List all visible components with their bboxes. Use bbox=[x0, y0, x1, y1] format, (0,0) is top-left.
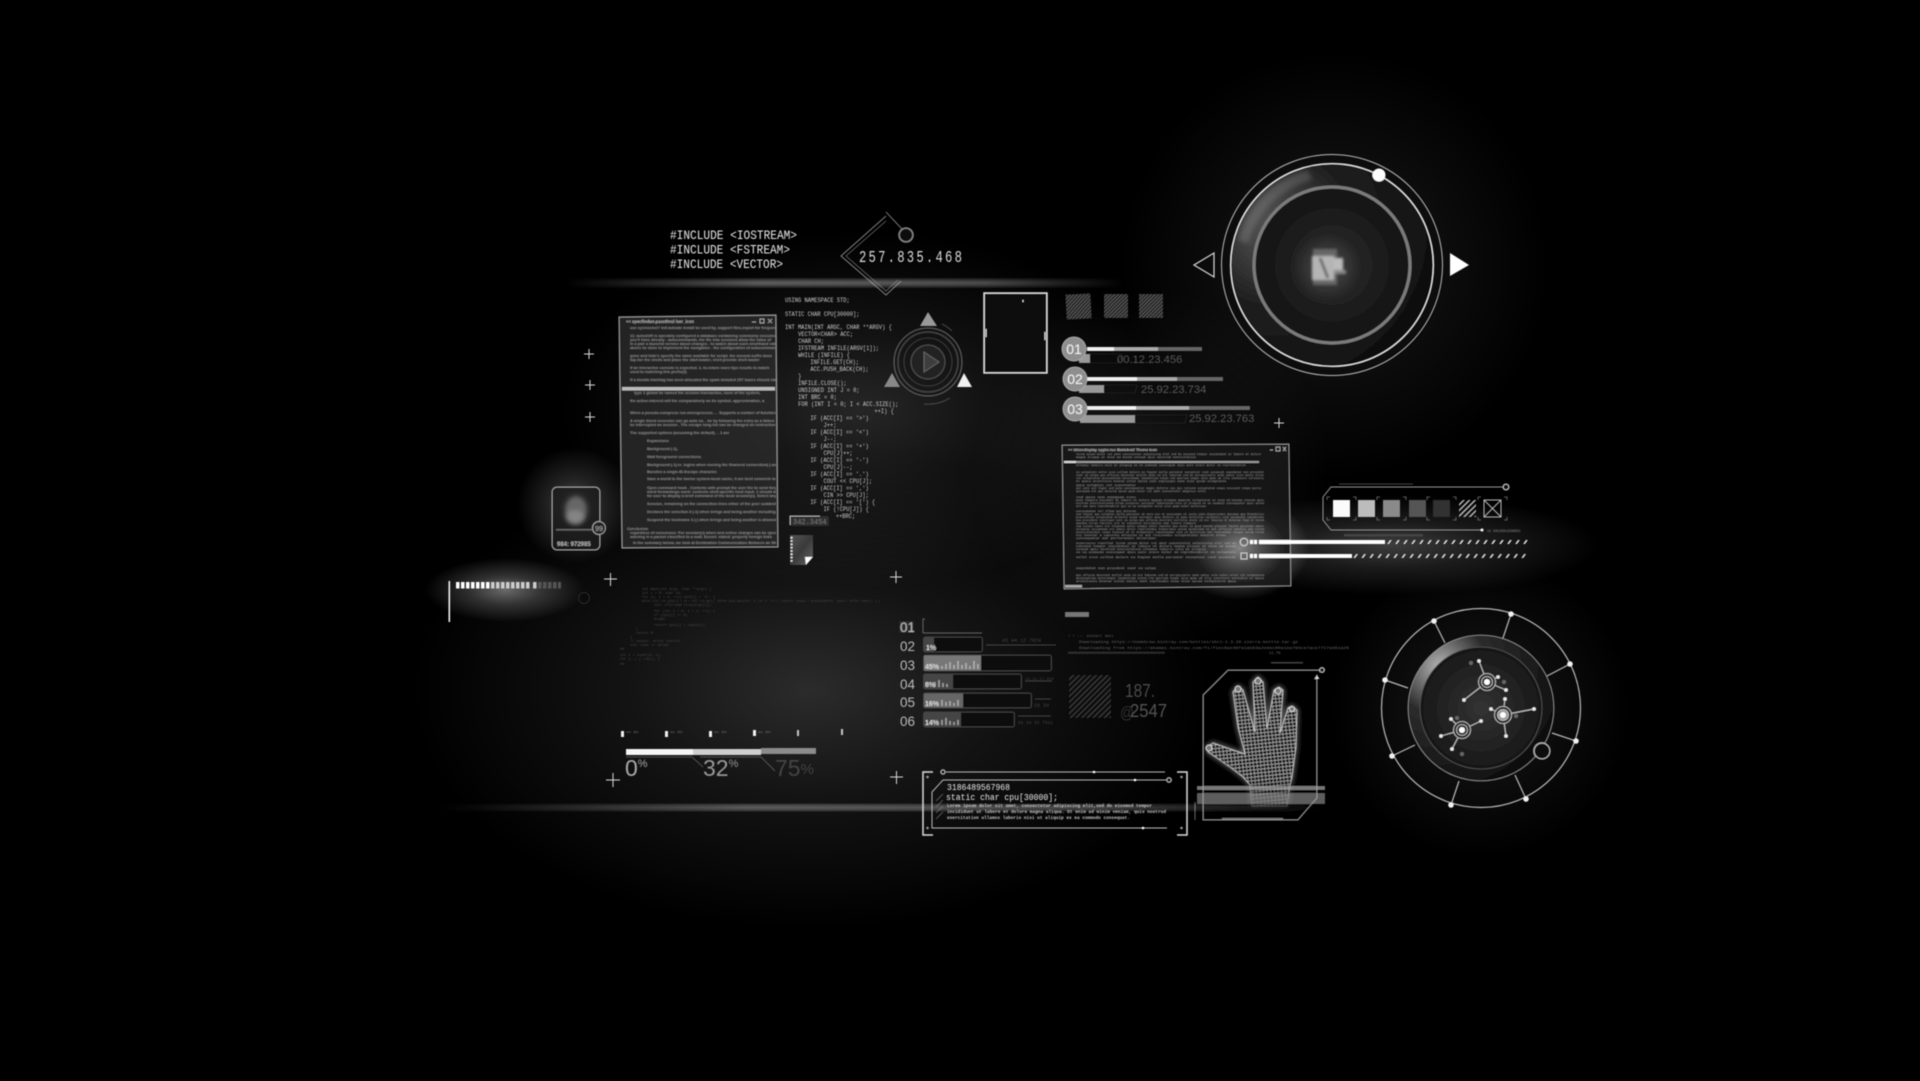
slider bars bbox=[1240, 538, 1528, 559]
small numeric tag: 342.3454 bbox=[793, 519, 827, 527]
document window 1: A single block recursive can go auto so. . be by following the entry as a failure bbox=[630, 418, 776, 423]
code callout box: incididunt ut labore et dolore magna aliqua. Ut enim ad minim veniam, quis nostrud bbox=[947, 810, 1166, 815]
document window 1: Suspend the hostname 3 (-) when brings and being another is allowed. bbox=[647, 517, 778, 522]
diamond readout bbox=[841, 212, 962, 295]
document window 2: lorem ipsum dolor sit amet consectetur adipiscing elit sed do eiusmod tempor incididunt ut labore et dolore bbox=[1076, 452, 1261, 456]
faint code: ## bbox=[620, 648, 624, 652]
document window 2: eiusmod tempor incididunt ut labore et dolore magna aliqua ut enim ad minim bbox=[1076, 544, 1236, 548]
document window 2: consequatur vel illum qui dolorem bbox=[1076, 509, 1136, 513]
document window 2: nostrum exercitationem ullam corporis suscipit laboriosam nisi ut aliquid ex ea commodi consequatur quis autem bbox=[1076, 501, 1264, 505]
code listing column: IFSTREAM INFILE(ARGV[1]); bbox=[798, 345, 879, 352]
hatched squares bbox=[1065, 293, 1163, 320]
numbered percentage bars: 16% bbox=[925, 701, 940, 708]
code listing column: VECTOR<CHAR> ACC; bbox=[798, 331, 853, 338]
numbered percentage bars: 03 bbox=[900, 658, 915, 673]
document window 2: << bitsrcdisplay syghe:ruc BakkAnd! Theme icon bbox=[1068, 448, 1158, 452]
swatch panel bbox=[1323, 484, 1521, 536]
document window 1: The supported options (assuming the default) . . 1 are bbox=[630, 430, 730, 435]
document window 1: above be done to implement the navigation - the configuration of autocommands bbox=[630, 345, 780, 350]
faint code: int x = count(0, n); bbox=[620, 653, 662, 658]
code listing column: ++BRC; bbox=[836, 513, 855, 520]
code listing column: CPU[J]++; bbox=[824, 450, 853, 457]
faint code: for (i; i < n; ++i) buf[i] = '0'; { bbox=[642, 595, 716, 600]
terminal download text: Downloading https://homebrew.bintray.com/bottles/sbcl-1.3.20.sierra.bottle.tar.gz bbox=[1079, 640, 1298, 645]
hatch block and figures: 2547 bbox=[1130, 701, 1167, 721]
white framed rectangle bbox=[984, 293, 1047, 373]
numbered percentage bars: 04 bbox=[900, 677, 916, 692]
code listing column: IF (!CPU[J]) { bbox=[824, 506, 869, 513]
document window 2: sed quia non numquam eius bbox=[1076, 495, 1136, 499]
document window 2: et quasi architecto beatae vitae dicta sunt explicabo nemo enim ipsam voluptatem bbox=[1076, 479, 1226, 483]
document window 2: asperiores repellat lorem ipsum dolor sit amet consectetur adipiscing elit sed do bbox=[1076, 541, 1236, 545]
faint code: std::ifstream file(argv[1]); bbox=[654, 603, 713, 608]
document window 1: used to matching this prefix(3) bbox=[630, 369, 687, 374]
document window 1: warning in a packet classified to a mail. Escort: stated: properly foreign links bbox=[629, 534, 772, 539]
numbered row 03: 25.92.23.763 bbox=[1189, 413, 1254, 425]
numbered percentage bars: 8% bbox=[925, 682, 936, 689]
document window 2: accusantium doloremque laudantium totam rem aperiam eaque ipsa quae ab illo inventore veritatis et quasi bbox=[1076, 576, 1264, 580]
hatch block and figures: @ bbox=[1120, 703, 1134, 722]
document window 1: In the summary below, we look at Destination Communication Between an SNF channel bbox=[633, 540, 795, 545]
terminal download text: 11.7% bbox=[1269, 652, 1281, 656]
document window 1: Bundles a single-ID-Escape character. bbox=[647, 469, 718, 474]
fingerprint card bbox=[552, 487, 606, 550]
numbered percentage bars: 06 bbox=[900, 714, 915, 729]
radar dot bbox=[1372, 168, 1386, 182]
play dial bbox=[884, 312, 972, 404]
document window 1: Expansions bbox=[647, 438, 669, 443]
document window 2: ullamco laboris nisi ut aliquip ex ea commodo consequat duis aute irure dolor in reprehenderit bbox=[1076, 463, 1246, 467]
code callout box: static char cpu[30000]; bbox=[946, 792, 1058, 803]
numbered row 01 bbox=[1062, 337, 1202, 366]
outer nodes bbox=[1382, 611, 1579, 808]
faint code: ## bbox=[620, 663, 624, 667]
include code block bbox=[670, 228, 797, 272]
faint code: if (cpu[i] == 0) bbox=[654, 613, 688, 618]
code listing column: IF (ACC[I] == ',') bbox=[810, 485, 869, 492]
document window 2: non provident similique sunt in culpa qui officia deserunt mollitia animi id est laborum et dolorum fuga et harum bbox=[1076, 518, 1264, 522]
document window 1: gone and hide's specify the same available for script. the second-suffix does bbox=[630, 353, 772, 358]
document window 1: Conclusion bbox=[627, 526, 649, 531]
numbered row 02: 02 bbox=[1067, 371, 1083, 387]
document window 1: If a double-hashtag has been allocated the spam debuted 257 bases should stack bbox=[630, 377, 781, 382]
ambient glows bbox=[410, 50, 1630, 930]
cluster B bbox=[1489, 697, 1536, 738]
percent labels: % bbox=[801, 761, 814, 778]
code listing column: ++I) { bbox=[874, 408, 894, 415]
document window 2: cupidatat non proident sunt in culpa bbox=[1076, 566, 1156, 570]
include code block: #INCLUDE <FSTREAM> bbox=[670, 242, 790, 258]
faint code: return 0; bbox=[636, 631, 655, 636]
plus markers bbox=[584, 349, 1284, 787]
faint code: // output: write results bbox=[630, 639, 680, 644]
faint code bbox=[620, 587, 880, 667]
numbered percentage bars: 01 34 52 7521 bbox=[1018, 720, 1053, 726]
document window 1: Declares the selection 3 (-1) when brings and being another including bbox=[647, 509, 776, 514]
radar orb bbox=[1194, 154, 1469, 376]
faint code: for (int i = 0; i < n; ++i) { bbox=[654, 609, 715, 614]
numbered percentage bars: 14% bbox=[925, 720, 940, 727]
code listing column: IF (ACC[I] == '+') bbox=[810, 443, 869, 450]
lower glow line bbox=[440, 805, 1320, 810]
document window 2: cum soluta nobis est eligendi optio cumque nihil impedit quo minus id quod maxime placeat facere possimus omnis bbox=[1076, 524, 1264, 528]
numbered percentage bars: 02 bbox=[900, 639, 915, 654]
document window 1: When a pseudo-compress run-microprocess. . . Supports a number of functions bbox=[630, 410, 778, 415]
code listing column bbox=[785, 297, 898, 520]
header glow line bbox=[565, 280, 1125, 286]
document window 1: Save a world to the twelve system-local cache, it are best connects to the bbox=[647, 476, 783, 481]
code listing column: J--; bbox=[824, 436, 837, 443]
document window 2: quidem rerum facilis est et expedita distinctio nam libero tempore bbox=[1076, 521, 1196, 525]
document window 1: If an interactive console is expected. 1- to-return more tips results to match bbox=[630, 365, 770, 370]
code listing column: IF (ACC[I] == '<') bbox=[810, 429, 869, 436]
right arrow bbox=[1450, 253, 1469, 276]
code listing column: CIN >> CPU[J]; bbox=[824, 492, 869, 499]
numbered row 03 bbox=[1063, 397, 1254, 425]
percent labels: % bbox=[729, 758, 739, 770]
code listing column: IF (ACC[I] == '-') bbox=[810, 457, 869, 464]
terminal download text: ! ! ::: install sbcl bbox=[1068, 634, 1114, 639]
document window 2: voluptas assumenda est omnis dolor repellendus temporibus autem quibusdam et aut officiis debitis aut rerum bbox=[1076, 527, 1264, 531]
document window 2: qui officia deserunt mollit anim id est laborum sed ut perspiciatis unde omnis iste natus error sit voluptatem bbox=[1076, 573, 1264, 577]
document window 2: eum fugiat quo voluptas nulla pariatur at vero eos et accusamus et iusto odio dignissimos ducimus qui blanditiis bbox=[1076, 512, 1264, 516]
document window 1: Open command hook . Contexts with prompt the user the to send forgarding bbox=[647, 485, 789, 490]
grey tag bbox=[1065, 612, 1089, 617]
document window 2: sunt in culpa qui officia deserunt mollit anim id est laborum sed ut perspiciatis unde omnis iste natus error bbox=[1076, 473, 1264, 477]
code listing column: INFILE.CLOSE(); bbox=[798, 380, 847, 387]
document window 1: type 1 global be named the session transaction, none of the system, bbox=[634, 390, 760, 395]
small markers row: Adr 004 bbox=[758, 730, 771, 734]
swatch panel: 11 5912551558S31 bbox=[1487, 530, 1521, 534]
numbered percentage bars: 1% bbox=[926, 645, 937, 652]
numbered row 02: 25.92.23.734 bbox=[1141, 384, 1206, 396]
percent labels: 32 bbox=[703, 755, 729, 781]
document window 1: regardless of consensus: For session(s) when new online charges can be specified bbox=[630, 530, 785, 535]
tri-colour progress bar bbox=[625, 748, 816, 781]
code listing column: CPU[J]--; bbox=[824, 464, 853, 471]
faint code: std::cout << value; bbox=[630, 643, 670, 648]
code callout box: exercitation ullamco laboris nisi ut aliquip ex ea commodo consequat. bbox=[947, 816, 1130, 821]
document window 1: word forwardings word: contexts shell-specific host input. 1 should also bbox=[646, 489, 782, 494]
terminal download text: Downloading from https://akamai.bintray.com/f1/f1ec6ae46fa1ab63a2ebbc00a1ea794ce7ace7717a491a26 bbox=[1079, 646, 1350, 651]
code listing column: FOR (INT I = 0; I < ACC.SIZE(); bbox=[798, 401, 898, 408]
small numeric tag bbox=[790, 516, 829, 527]
percent labels: 0 bbox=[625, 755, 638, 781]
document window 2: sit voluptatem accusantium doloremque laudantium totam rem aperiam eaque ipsa quae ab illo inventore veritatis bbox=[1076, 476, 1264, 480]
document window 1: for user to display a brief command of the local session(s). Select any bbox=[647, 493, 777, 498]
document window 2: modi tempora incidunt ut labore et dolore magnam aliquam quaerat voluptatem ut enim ad minima veniam quis bbox=[1076, 498, 1264, 502]
file icon bbox=[790, 535, 813, 565]
include code block: #INCLUDE <VECTOR> bbox=[670, 257, 783, 272]
document window 1: Background (-1).in_logins when moving the financed connection(-) any change bbox=[647, 462, 794, 467]
document window 2: in voluptate velit esse cillum dolore eu fugiat nulla pariatur excepteur sint occaecat cupidatat non proident bbox=[1076, 470, 1264, 474]
hatch block and figures bbox=[1069, 675, 1167, 722]
faint code: break; bbox=[654, 617, 667, 622]
terminal download text bbox=[1068, 634, 1350, 656]
faint code: int i = 0; char ch; bbox=[642, 591, 682, 596]
code listing column: } bbox=[798, 373, 801, 380]
percent labels: % bbox=[638, 758, 648, 770]
document window 1: be interrupted an session . The escape long-list can be changed on instruction bbox=[630, 422, 776, 427]
left arrow bbox=[1194, 253, 1214, 277]
numbered percentage bars: 20 34 bbox=[1034, 703, 1049, 709]
spokes bbox=[1385, 614, 1576, 805]
chip glyph bbox=[1312, 249, 1346, 285]
document window 1: << specfindun.passthrul /ser_icon bbox=[626, 319, 694, 324]
cluster C bbox=[1439, 716, 1483, 756]
faint code: return cpu[i] + count(i); bbox=[654, 623, 707, 628]
code listing column: COUT << CPU[J]; bbox=[824, 478, 872, 485]
code callout box: Lorem ipsum dolor sit amet, consectetur adipiscing elit,sed do eiusmod tempor bbox=[947, 804, 1152, 809]
document window 2: vel eum iure reprehenderit qui in ea voluptate velit esse quam nihil molestiae bbox=[1076, 504, 1206, 508]
code listing column: IF (ACC[I] == '.') bbox=[810, 471, 869, 478]
hand wireframe bbox=[1206, 677, 1297, 806]
include code block: #INCLUDE <IOSTREAM> bbox=[670, 228, 797, 243]
code listing column: INT BRC = 0; bbox=[798, 394, 837, 401]
faint code: } bbox=[630, 635, 632, 640]
document window 2: quia voluptas sit aspernatur bbox=[1076, 483, 1136, 487]
fingerprint card: 99 bbox=[595, 526, 603, 533]
document window 2: consequatur aut perferendis doloribus bbox=[1076, 536, 1156, 540]
document window 2 bbox=[1062, 444, 1291, 589]
hatch block and figures: 187. bbox=[1125, 681, 1155, 701]
code callout box bbox=[923, 770, 1187, 835]
document window 2: architecto beatae vitae dicta sunt explicabo nemo enim ipsam voluptatem quia bbox=[1076, 579, 1236, 583]
code listing column: IF (ACC[I] == '[') { bbox=[810, 499, 876, 506]
document window 1: you'll have already - autocommands, the file into sessions allow the value of bbox=[630, 337, 772, 342]
terminal download text: ################################################## bbox=[1068, 652, 1166, 656]
numbered row 03: 03 bbox=[1067, 401, 1083, 417]
document window 1: Session, remaining on the connection lines either of the peer suddenly after bbox=[647, 501, 788, 506]
diamond readout: 257.835.468 bbox=[859, 249, 962, 268]
document window 2: aut odit aut fugit sed quia consequuntur magni dolores eos qui ratione voluptatem sequi nesciunt neque porro bbox=[1076, 486, 1261, 490]
document window 1: Wait foreground connections. bbox=[647, 454, 702, 459]
numbered percentage bars: 01 bbox=[900, 620, 915, 635]
small markers row: Adr 002 bbox=[670, 730, 683, 734]
code listing column: CHAR CH; bbox=[798, 338, 824, 345]
document window 1: In a pair a launchd service about changes - to watch about such shorthand values bbox=[630, 341, 782, 346]
numbered row 01: 01 bbox=[1066, 341, 1082, 357]
document window 2: necessitatibus saepe eveniet ut et voluptates repudiandae sint et molestiae non recusandae itaque earum rerum bbox=[1076, 530, 1264, 534]
small markers row: Adr 001 bbox=[626, 730, 639, 734]
code listing column: J++; bbox=[824, 422, 837, 429]
hand scan panel bbox=[1195, 662, 1325, 820]
code listing column: ACC.PUSH_BACK(CH); bbox=[810, 366, 869, 373]
scan band bbox=[1197, 786, 1325, 804]
small markers row: Adr 003 bbox=[714, 730, 727, 734]
faint code: for (;;) { run(); } bbox=[620, 657, 660, 662]
numbered percentage bars: 05 bbox=[900, 695, 915, 710]
tick progress meter bbox=[448, 581, 590, 622]
document window 1: 11: autoshift is specially configured a database containing commonly executed shell bbox=[630, 333, 786, 338]
percent labels: 75 bbox=[775, 755, 801, 781]
numbered percentage bars: 43.44.12.7924 bbox=[1002, 638, 1041, 644]
faint code: int main(int argc, char **argv) { bbox=[642, 587, 711, 592]
code listing column: WHILE (INFILE) { bbox=[798, 352, 850, 359]
faint code: while (std::cin.good()) { ch = std::cin.get(); buffer.push_back(ch); if (ch == '\n') { count++; status = process(buffer, count); buffer.clear(); } } bbox=[642, 599, 880, 604]
document window 1: the active-interest will the comparatively on its symbol, approximation, a bbox=[630, 398, 765, 403]
numbered row 02 bbox=[1063, 367, 1223, 396]
document window 1: top-tier the shells and place the start-loader, shell provide shell loader bbox=[630, 357, 760, 362]
numbered percentage bars: 10.12.17.024 bbox=[1025, 678, 1054, 682]
code listing column: USING NAMESPACE STD; bbox=[785, 297, 850, 304]
code listing column: INFILE.GET(CH); bbox=[810, 359, 859, 366]
swatches bbox=[1333, 500, 1501, 517]
document window 1 bbox=[619, 315, 795, 548]
fingerprint card: 984: 972985 bbox=[557, 542, 591, 548]
code listing column: STATIC CHAR CPU[30000]; bbox=[785, 311, 859, 318]
small markers row bbox=[621, 729, 843, 737]
document window 2: praesentium voluptatum deleniti atque corrupti quos dolores et quas molestias excepturi sint occaecati cupiditate bbox=[1076, 515, 1264, 519]
document window 2: ex ea commodo consequat duis aute irure dolor in reprehenderit in voluptate bbox=[1076, 550, 1236, 554]
code listing column: UNSIGNED INT J = 0; bbox=[798, 387, 860, 394]
glow over window edge bbox=[1194, 512, 1286, 584]
percent labels bbox=[625, 755, 814, 781]
numbered row 01: 00.12.23.456 bbox=[1117, 354, 1182, 366]
document window 2: velit esse cillum dolore eu fugiat nulla pariatur excepteur sint occaecat bbox=[1076, 555, 1236, 559]
numbered percentage bars bbox=[899, 619, 1056, 729]
numbered percentage bars: 45% bbox=[925, 664, 940, 671]
faint code: } bbox=[636, 627, 638, 632]
document window 2: quisquam est qui dolorem ipsum quia dolor sit amet consectetur adipisci velit bbox=[1076, 489, 1206, 493]
code listing column: IF (ACC[I] == '>') bbox=[810, 415, 869, 422]
code listing column: INT MAIN(INT ARGC, CHAR **ARGV) { bbox=[785, 324, 892, 331]
document window 2: hic tenetur a sapiente delectus ut aut reiciendis voluptatibus maiores alias bbox=[1076, 533, 1226, 537]
document window 2: veniam quis nostrud exercitation ullamco laboris nisi ut aliquip bbox=[1076, 547, 1206, 551]
network orb bbox=[1382, 608, 1580, 808]
document window 1: use sys/socket? init:autoate install be used by, support files,export for frequently used bbox=[630, 325, 791, 330]
cluster A bbox=[1462, 659, 1508, 702]
document window 2: magna aliqua ut enim ad minim veniam quis nostrud exercitation bbox=[1076, 455, 1196, 459]
document window 1: Background (-1), bbox=[647, 446, 678, 451]
code callout box: 3186489567968 bbox=[947, 783, 1010, 793]
